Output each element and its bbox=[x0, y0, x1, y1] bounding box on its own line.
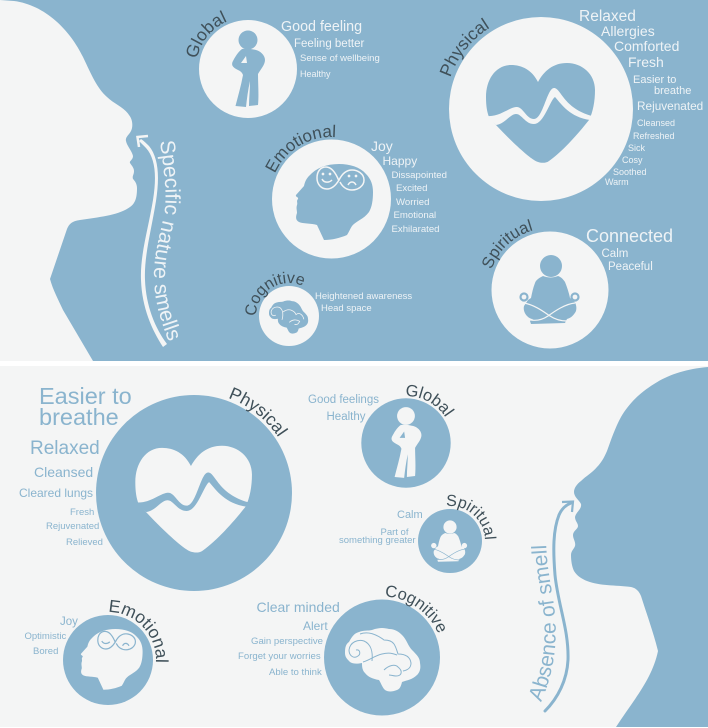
list: cognitive effects: Able to think bbox=[269, 667, 322, 678]
list: physical effects: Easier to bbox=[39, 383, 132, 409]
arrow head bbox=[138, 136, 148, 147]
list: physical effects: Relaxed bbox=[30, 438, 100, 459]
list: physical effects: breathe bbox=[39, 404, 119, 430]
list: global effects: Good feeling bbox=[281, 19, 362, 35]
panel: absence of smell background bbox=[0, 366, 708, 727]
label: specific nature smells: Specific nature smells bbox=[154, 141, 181, 340]
circle bbox=[492, 232, 608, 348]
list: emotional effects: Excited bbox=[396, 183, 427, 194]
list: global effects: Healthy bbox=[300, 69, 331, 79]
circle group: spiritual (top) bbox=[482, 219, 673, 348]
circle bbox=[324, 600, 440, 716]
list: physical effects: Cleared lungs bbox=[19, 486, 93, 500]
list: physical effects: Relieved bbox=[66, 537, 103, 548]
list: physical effects: Rejuvenated bbox=[637, 99, 703, 113]
list: physical effects: Rejuvenated bbox=[46, 521, 99, 532]
icon: heart with pulse bbox=[135, 446, 252, 553]
list: physical effects: breathe bbox=[654, 85, 691, 97]
icon: heart with pulse bbox=[486, 63, 595, 163]
list: physical effects: Cosy bbox=[622, 155, 643, 165]
list: physical effects: Easier to bbox=[633, 74, 676, 86]
list: physical effects bbox=[579, 8, 703, 187]
silhouette: face inhaling nature smells bbox=[0, 0, 137, 361]
list: physical effects: Cleansed bbox=[34, 464, 93, 480]
arrow shaft bbox=[139, 139, 167, 347]
list: global effects bbox=[308, 394, 379, 423]
icon: brain bbox=[345, 628, 420, 692]
circle bbox=[96, 395, 292, 591]
list: spiritual effects: Peaceful bbox=[608, 261, 653, 273]
list: spiritual effects: something greater bbox=[339, 535, 416, 546]
circle group: spiritual (bottom) bbox=[339, 494, 496, 573]
list: physical effects: Soothed bbox=[613, 167, 647, 177]
arrow shaft bbox=[545, 503, 571, 711]
list: emotional effects: Bored bbox=[33, 646, 58, 657]
list: spiritual effects bbox=[586, 226, 673, 273]
list: global effects: Sense of wellbeing bbox=[300, 53, 380, 64]
circle bbox=[259, 286, 319, 346]
list: emotional effects: Worried bbox=[396, 197, 429, 208]
circle group: emotional (top) bbox=[265, 124, 447, 258]
list: spiritual effects: Part of bbox=[380, 527, 409, 538]
list: cognitive effects: Clear minded bbox=[256, 599, 340, 615]
list: cognitive effects bbox=[238, 599, 340, 678]
heading: Emotional: Emotional bbox=[110, 600, 169, 662]
circle bbox=[418, 509, 482, 573]
heading: Emotional: Emotional bbox=[265, 124, 336, 172]
icon: head with faces bbox=[296, 164, 373, 240]
list: emotional effects: Emotional bbox=[394, 210, 436, 221]
list: global effects: Feeling better bbox=[294, 38, 364, 50]
circle group: emotional (bottom) bbox=[24, 600, 169, 705]
list: cognitive effects bbox=[315, 291, 412, 314]
list: physical effects: Comforted bbox=[614, 38, 679, 54]
list: emotional effects: Optimistic bbox=[24, 631, 66, 642]
list: emotional effects: Joy bbox=[371, 138, 393, 154]
arrow: rising toward mouth bbox=[545, 502, 573, 711]
icon: head with faces bbox=[81, 629, 143, 690]
list: spiritual effects: Connected bbox=[586, 226, 673, 246]
heading: Cognitive: Cognitive bbox=[245, 272, 304, 315]
arrow: rising toward nose bbox=[138, 136, 167, 347]
circle group: cognitive (top) bbox=[245, 272, 412, 346]
list: spiritual effects: Calm bbox=[602, 248, 628, 260]
circle group: global (top) bbox=[186, 10, 380, 118]
list: global effects: Healthy bbox=[326, 411, 366, 423]
heading: Global: Global bbox=[406, 384, 455, 417]
list: physical effects: Sick bbox=[628, 143, 646, 153]
circle group: physical (bottom) bbox=[19, 383, 292, 591]
circle group: cognitive (bottom) bbox=[238, 586, 445, 716]
circle bbox=[449, 17, 633, 201]
list: global effects bbox=[281, 19, 380, 79]
list: emotional effects: Happy bbox=[382, 154, 417, 168]
heading: Spiritual: Spiritual bbox=[482, 219, 532, 268]
list: physical effects bbox=[19, 383, 132, 548]
circle bbox=[199, 20, 297, 118]
label: absence of smell: Absence of smell bbox=[530, 546, 556, 702]
list: global effects: Good feelings bbox=[308, 394, 379, 406]
list: physical effects: Cleansed bbox=[637, 118, 675, 128]
heading: Global: Global bbox=[186, 10, 226, 57]
arrow head bbox=[562, 502, 573, 512]
circle group: global (bottom) bbox=[308, 384, 455, 488]
heading: Physical: Physical bbox=[440, 18, 490, 76]
list: emotional effects bbox=[24, 616, 78, 657]
list: cognitive effects: Forget your worries bbox=[238, 651, 321, 662]
list: physical effects: Fresh bbox=[70, 507, 94, 518]
list: physical effects: Refreshed bbox=[633, 131, 675, 141]
list: physical effects: Warm bbox=[605, 177, 629, 187]
list: physical effects: Fresh bbox=[628, 54, 664, 70]
heading: Spiritual: Spiritual bbox=[446, 494, 496, 539]
silhouette: face with absence of smell bbox=[571, 367, 708, 727]
heading: Physical: Physical bbox=[229, 387, 288, 436]
list: emotional effects: Exhilarated bbox=[392, 224, 440, 235]
list: cognitive effects: Gain perspective bbox=[251, 636, 323, 647]
panel: specific nature smells background bbox=[0, 0, 708, 361]
icon: brain bbox=[269, 301, 308, 334]
list: emotional effects: Dissapointed bbox=[392, 170, 447, 181]
list: physical effects: Relaxed bbox=[579, 8, 636, 25]
list: spiritual effects: Calm bbox=[397, 509, 423, 521]
list: emotional effects bbox=[371, 138, 447, 235]
list: cognitive effects: Heightened awareness bbox=[315, 291, 412, 302]
icon: standing person bbox=[392, 407, 421, 478]
circle group: physical (top) bbox=[440, 8, 703, 201]
list: cognitive effects: Alert bbox=[303, 619, 328, 633]
list: cognitive effects: Head space bbox=[321, 303, 372, 314]
heading: Cognitive: Cognitive bbox=[386, 586, 445, 632]
icon: meditating figure bbox=[520, 255, 578, 324]
circle bbox=[63, 615, 153, 705]
list: spiritual effects bbox=[339, 509, 423, 546]
circle bbox=[272, 140, 391, 258]
icon: meditating figure bbox=[431, 520, 467, 562]
list: physical effects: Allergies bbox=[601, 23, 655, 39]
circle bbox=[361, 398, 451, 488]
icon: standing person bbox=[232, 30, 265, 107]
list: emotional effects: Joy bbox=[60, 616, 78, 628]
